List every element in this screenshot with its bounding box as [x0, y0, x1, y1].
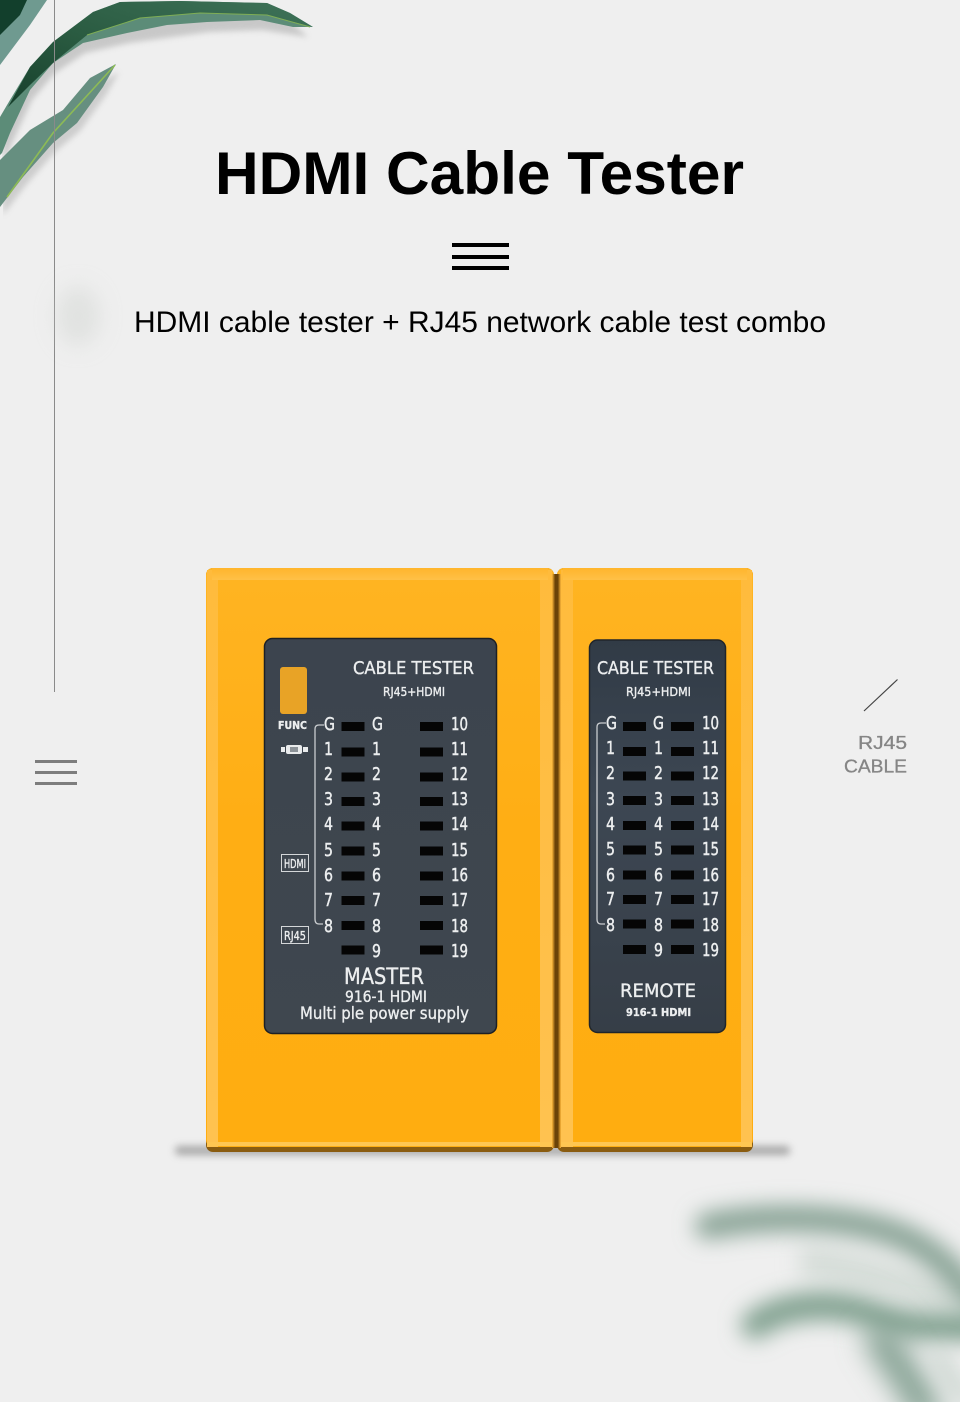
master pin labels left: G: [324, 714, 335, 735]
callout label: RJ45 CABLE: RJ45: [858, 733, 907, 753]
remote pin labels middle: 9: [654, 940, 663, 961]
blurred leaves bottom right: [708, 1218, 960, 1402]
master pin labels left: 5: [324, 840, 333, 861]
remote pin labels middle: 8: [654, 915, 663, 936]
remote pin labels left: 2: [606, 763, 615, 784]
HDMI badge: [282, 854, 308, 872]
RJ45 badge: RJ45: [284, 929, 306, 943]
master pin labels middle: 3: [372, 789, 381, 810]
master pin labels left: [324, 714, 335, 937]
remote pin labels right: 15: [702, 839, 719, 860]
master pin labels middle: G: [372, 714, 383, 735]
remote heading: CABLE TESTER: [597, 658, 714, 679]
menu icon: [35, 760, 77, 785]
remote pin labels right: 10: [702, 713, 719, 734]
remote pin labels left: [606, 713, 617, 936]
remote pin labels right: 19: [702, 940, 719, 961]
master pin labels left: 3: [324, 789, 333, 810]
blurred smudge: [56, 286, 100, 346]
decorative leaves top left: [0, 0, 313, 215]
remote bracket: [597, 723, 606, 924]
remote pin labels right: 14: [702, 814, 719, 835]
master pin labels middle: 4: [372, 814, 381, 835]
master heading: CABLE TESTER: [353, 658, 474, 679]
master pin labels right: [451, 714, 468, 962]
remote pin labels left: 7: [606, 889, 615, 910]
vertical line: [54, 0, 55, 692]
remote pin labels middle: 7: [654, 889, 663, 910]
master pin labels middle: 5: [372, 840, 381, 861]
remote panel: [590, 640, 726, 1032]
master pin labels right: 19: [451, 941, 468, 962]
remote pin labels left: 5: [606, 839, 615, 860]
remote pin labels middle: 3: [654, 789, 663, 810]
title: HDMI Cable Tester: [215, 140, 744, 207]
master pin labels right: 13: [451, 789, 468, 810]
master pin labels right: 10: [451, 714, 468, 735]
master pin labels right: 18: [451, 916, 468, 937]
remote subheading: RJ45+HDMI: [626, 685, 691, 699]
remote pin labels right: 12: [702, 763, 719, 784]
remote pin labels middle: 1: [654, 738, 663, 759]
remote pin labels right: 13: [702, 789, 719, 810]
master pin labels middle: 9: [372, 941, 381, 962]
master pin labels middle: 2: [372, 764, 381, 785]
RJ45 badge: [282, 926, 308, 944]
MASTER label: MASTER: [344, 965, 424, 990]
device shadow: [175, 1146, 790, 1155]
master pin labels right: 15: [451, 840, 468, 861]
remote pin labels middle: [653, 713, 664, 961]
device: remote unit: [552, 568, 753, 1152]
HDMI badge: HDMI: [284, 857, 306, 871]
master pin labels right: 14: [451, 814, 468, 835]
callout label: RJ45 CABLE: CABLE: [844, 756, 907, 776]
master pin labels right: 17: [451, 890, 468, 911]
master pin labels left: 1: [324, 739, 333, 760]
remote body: [557, 568, 753, 1152]
device: master unit: [206, 568, 554, 1152]
title divider icon: [452, 243, 509, 270]
gap between units: [552, 574, 561, 1148]
remote pin labels right: 17: [702, 889, 719, 910]
master pin labels middle: 1: [372, 739, 381, 760]
remote pin labels right: 16: [702, 865, 719, 886]
remote pin labels middle: 5: [654, 839, 663, 860]
callout label: RJ45 CABLE: [844, 733, 907, 776]
remote pin labels left: 3: [606, 789, 615, 810]
master pin labels left: 4: [324, 814, 333, 835]
master subheading: RJ45+HDMI: [383, 685, 445, 699]
master panel: [264, 638, 496, 1034]
REMOTE label: REMOTE: [620, 980, 696, 1002]
remote pin labels left: 8: [606, 915, 615, 936]
FUNC button: [280, 667, 307, 714]
power supply note: Multi ple power supply: [300, 1004, 469, 1024]
remote pin labels left: G: [606, 713, 617, 734]
master pin labels middle: 8: [372, 916, 381, 937]
remote pin labels left: 1: [606, 738, 615, 759]
remote pin labels right: [702, 713, 719, 961]
remote pin labels right: 11: [702, 738, 719, 759]
master bracket: [315, 725, 324, 924]
remote pin labels left: 4: [606, 814, 615, 835]
remote pin labels middle: 6: [654, 865, 663, 886]
remote pin labels middle: 4: [654, 814, 663, 835]
remote pin labels right: 18: [702, 915, 719, 936]
callout line: [864, 680, 898, 711]
master pin labels right: 12: [451, 764, 468, 785]
master pin labels middle: 7: [372, 890, 381, 911]
master pin labels middle: 6: [372, 865, 381, 886]
FUNC label: FUNC: [278, 719, 307, 732]
remote pin labels left: 6: [606, 865, 615, 886]
remote pin labels middle: 2: [654, 763, 663, 784]
master pin labels right: 16: [451, 865, 468, 886]
remote pin labels middle: G: [653, 713, 664, 734]
master pin labels left: 8: [324, 916, 333, 937]
master pin labels right: 11: [451, 739, 468, 760]
icon: HDMI connector: [281, 745, 308, 754]
subtitle: HDMI cable tester + RJ45 network cable test combo: [134, 306, 826, 339]
remote LED slots: [623, 722, 694, 954]
master pin labels left: 2: [324, 764, 333, 785]
master pin labels middle: [372, 714, 383, 962]
master LED slots: [342, 722, 443, 954]
master pin labels left: 7: [324, 890, 333, 911]
remote model: 916-1 HDMI: [626, 1006, 691, 1019]
master model: 916-1 HDMI: [345, 987, 427, 1006]
master body: [206, 568, 554, 1152]
master pin labels left: 6: [324, 865, 333, 886]
